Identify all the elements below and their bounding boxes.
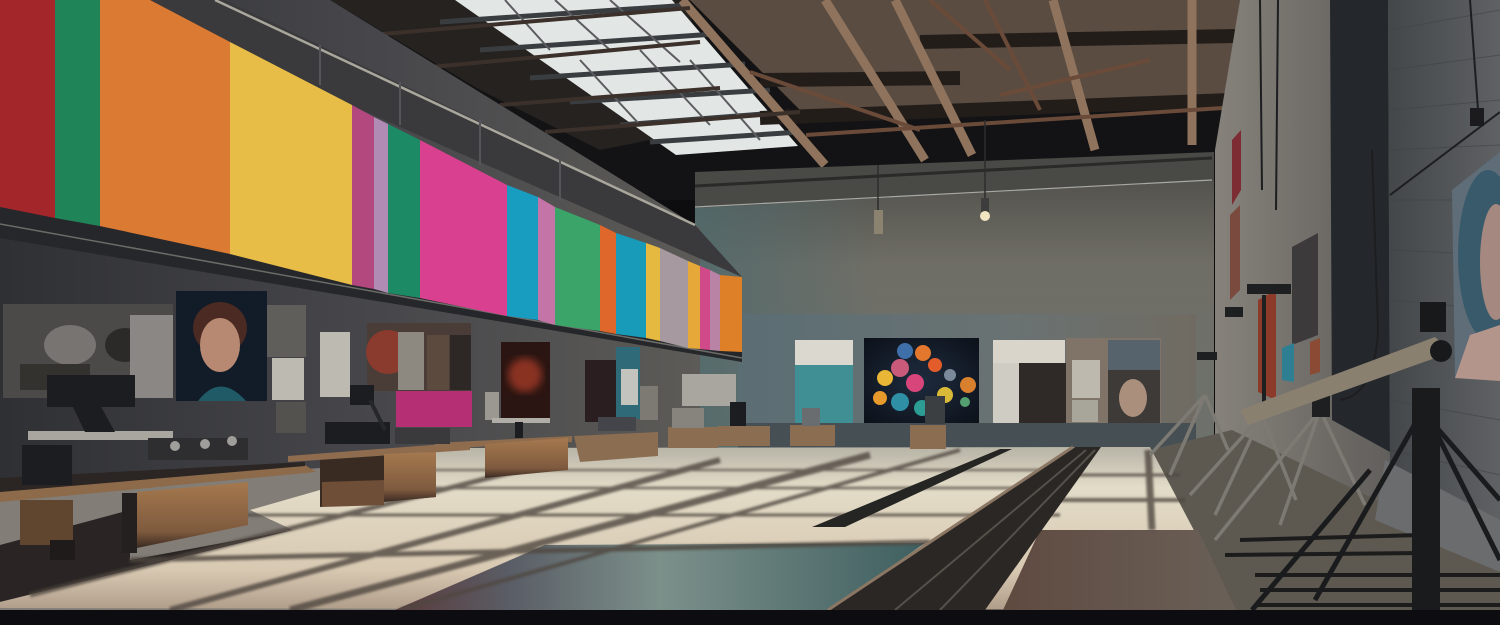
black floor strip bbox=[812, 449, 1012, 527]
floor base right platform bbox=[1150, 430, 1500, 610]
dark right floor bbox=[1003, 530, 1236, 610]
poster: grayscale figures bbox=[3, 304, 173, 398]
poster: white note bbox=[320, 332, 350, 397]
tripods: rear row bbox=[1150, 395, 1365, 540]
panel: right wall bbox=[1215, 0, 1500, 575]
tables: far row bbox=[574, 425, 946, 462]
posters on left wall bbox=[3, 291, 736, 433]
bottom black bar bbox=[0, 610, 1500, 625]
ribbed wall base bbox=[1375, 460, 1500, 572]
wall posters bbox=[1230, 130, 1320, 400]
left wall bbox=[0, 0, 742, 495]
portrait poster bbox=[1452, 152, 1500, 381]
poster: colored orbs bbox=[864, 338, 979, 423]
table: front left with equipment bbox=[0, 462, 316, 560]
panel: floor bbox=[0, 430, 1500, 610]
poster: teal panel bbox=[795, 340, 853, 423]
table: middle bbox=[288, 442, 470, 507]
tripods bbox=[1150, 284, 1500, 610]
cables bbox=[1260, 0, 1500, 400]
hanging lamps bbox=[874, 120, 990, 234]
poster: collage bbox=[366, 323, 471, 391]
front tripod bbox=[1252, 388, 1500, 610]
back wall bbox=[695, 152, 1214, 452]
table: centre bbox=[435, 436, 572, 478]
tables bbox=[0, 375, 946, 560]
brick section bbox=[1388, 0, 1500, 560]
background: ceiling bbox=[0, 0, 1500, 200]
floor base left shadow bbox=[0, 448, 440, 610]
bench equipment bbox=[22, 375, 945, 485]
jib camera arm bbox=[1240, 302, 1452, 425]
ceiling trusses bbox=[370, 0, 1235, 165]
magenta panel bbox=[396, 391, 472, 427]
floor rail track bbox=[828, 447, 1101, 610]
lit floor bbox=[0, 447, 1236, 610]
poster: woman portrait bbox=[176, 291, 306, 433]
panel: colour band wall bbox=[0, 0, 742, 352]
lower wall panel bbox=[738, 314, 1196, 450]
poster: dark red bbox=[501, 342, 550, 418]
poster cluster: notes and portraits bbox=[993, 338, 1161, 424]
dark column bbox=[1330, 0, 1390, 452]
panel: skylight bbox=[440, 0, 800, 155]
teal sheen bbox=[395, 543, 925, 610]
posters: far wall bbox=[485, 347, 736, 422]
window shadows bbox=[30, 450, 1185, 610]
platform shadow stripes bbox=[1225, 535, 1500, 605]
